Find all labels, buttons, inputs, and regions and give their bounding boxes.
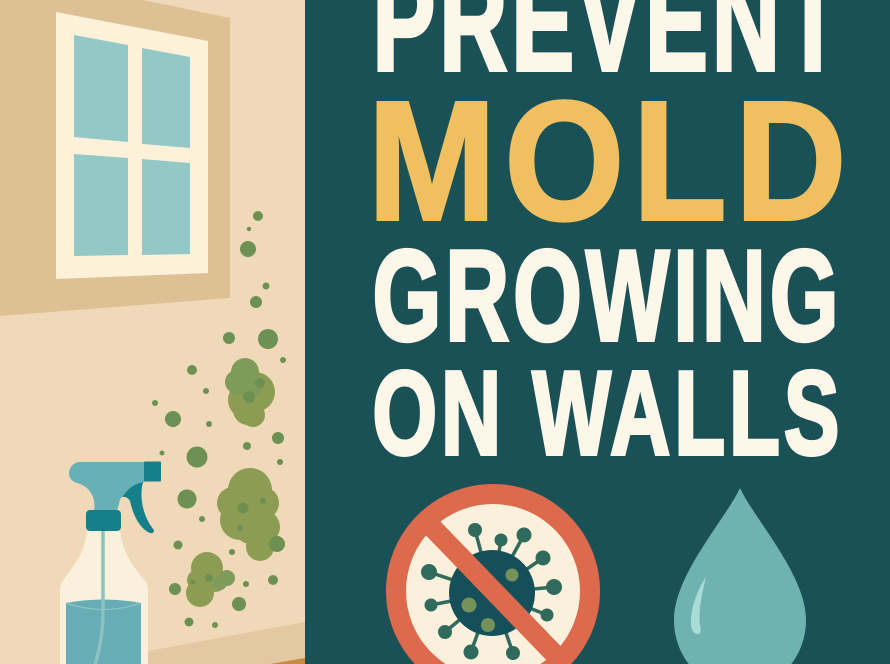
window — [56, 12, 208, 279]
window recess shadow — [0, 0, 230, 316]
mold spores — [152, 211, 286, 628]
heading: MOLD: MOLD — [368, 66, 855, 256]
floor — [270, 658, 305, 664]
virus — [421, 523, 562, 660]
icon: water drop — [674, 488, 806, 664]
panel: title background — [305, 0, 890, 664]
title — [368, 0, 855, 480]
mold patches — [186, 358, 280, 607]
panel: wall illustration — [0, 0, 306, 664]
icon: spray bottle — [60, 462, 161, 664]
baseboard — [148, 622, 305, 664]
icon: no mold virus — [396, 494, 590, 664]
